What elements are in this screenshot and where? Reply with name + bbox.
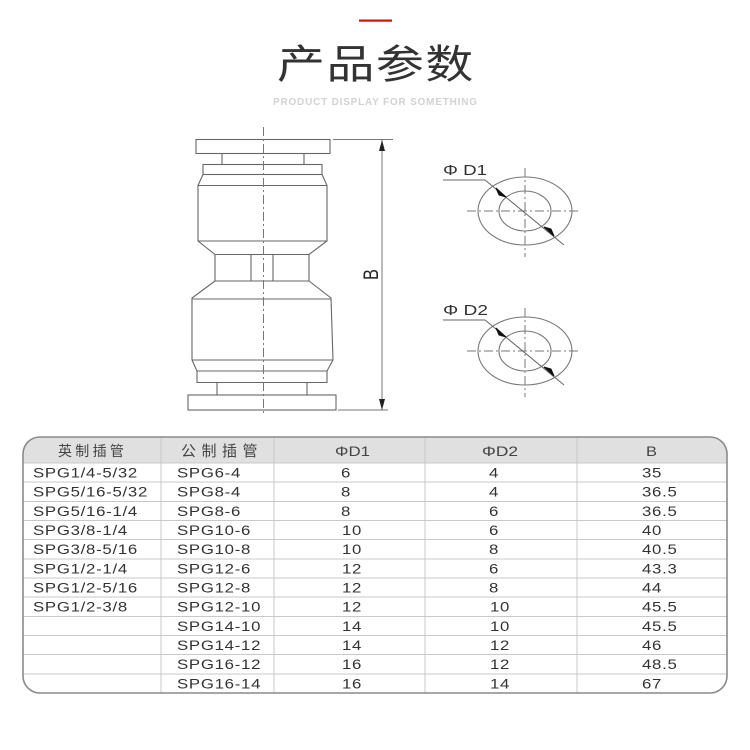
header row: ΦD2 [482,443,518,459]
row 9: 45.5 [642,619,678,634]
row 3: 36.5 [642,504,678,519]
row 5: SPG3/8-5/16 [33,542,138,558]
outer circle D2 [478,317,572,385]
top cap [196,140,330,154]
inner circle D1 [499,191,551,231]
row 7: SPG1/2-5/16 [33,581,138,596]
row 3: 8 [341,504,351,519]
row 9 [177,619,678,634]
row 2: SPG8-4 [177,485,241,500]
row 8: 12 [342,600,362,615]
bottom collar [197,371,327,382]
crosshair D1 [467,168,580,257]
row 10 [177,638,662,654]
header row: 公制插管 [181,443,263,460]
row 5: 10 [342,542,362,558]
row 12 [177,677,662,692]
subtitle: PRODUCT DISPLAY FOR SOMETHING [273,97,477,108]
upper body [198,174,327,254]
row 5: 8 [489,542,499,558]
row 11: 16 [342,657,362,673]
bottom neck [217,382,307,395]
grid lines [23,437,727,693]
row 11: SPG16-12 [177,657,261,673]
row 2: 8 [341,485,351,500]
row 9: 10 [490,619,510,634]
diagram: circle D2 [443,302,580,397]
row 8: SPG12-10 [177,600,261,615]
outer circle D1 [478,177,572,245]
leader D1 [443,180,564,245]
row 12: 16 [342,677,362,692]
row 5: SPG10-8 [177,542,251,558]
row 4: SPG10-6 [177,523,251,539]
row 2: 36.5 [642,485,678,500]
row 7: 44 [642,581,662,596]
arrows D2 [496,328,554,376]
row 8: 10 [490,600,510,615]
row 12: 67 [642,677,662,692]
title: 产品参数 [277,43,475,87]
header row [58,443,657,460]
label D1: Φ D1 [443,162,487,179]
row 4: 6 [489,523,499,539]
row 5: 40.5 [642,542,678,558]
arrows D1 [496,188,554,236]
bottom cap [188,395,336,410]
table border [23,437,727,693]
header row: ΦD1 [335,443,370,459]
row 2: SPG5/16-5/32 [33,485,148,500]
row 1: SPG6-4 [177,466,241,481]
row 4 [33,523,662,539]
table header background [23,437,727,463]
crosshair D2 [467,308,580,397]
row 3: 6 [489,504,499,519]
row 6: 43.3 [642,562,678,577]
row 9: 14 [342,619,362,634]
row 4: SPG3/8-1/4 [33,523,128,539]
row 3: SPG5/16-1/4 [33,504,138,519]
row 12: 14 [490,677,510,692]
row 6: 6 [489,562,499,577]
row 1: 35 [642,466,662,481]
lower body [192,281,333,371]
row 1 [33,466,662,481]
row 8: 45.5 [642,600,678,615]
top neck [222,154,304,164]
row 3 [33,504,678,519]
diagram: circle D1 [443,162,580,257]
row 11: 12 [490,657,510,673]
top collar [203,164,322,174]
row 7: 8 [489,581,499,596]
row 12: SPG16-14 [177,677,261,692]
row 2: 4 [489,485,499,500]
dimension B [333,140,393,410]
row 1: 6 [341,466,351,481]
row 4: 10 [342,523,362,539]
row 7: SPG12-8 [177,581,251,596]
row 9: SPG14-10 [177,619,261,634]
accent bar [359,20,392,22]
row 10: 46 [642,638,662,654]
row 10: 12 [490,638,510,654]
row 3: SPG8-6 [177,504,241,519]
leader D2 [443,320,564,385]
inner circle D2 [499,331,551,371]
label D2: Φ D2 [443,302,488,319]
row 6 [33,562,678,577]
specification table [23,437,727,693]
row 4: 40 [642,523,662,539]
row 6: 12 [342,562,362,577]
row 10: SPG14-12 [177,638,261,654]
header row: 英制插管 [58,443,127,459]
row 5 [33,542,678,558]
row 8: SPG1/2-3/8 [33,600,128,615]
waist [215,254,309,281]
row 1: SPG1/4-5/32 [33,466,138,481]
row 8 [33,600,678,615]
row 11 [177,657,678,673]
row 6: SPG1/2-1/4 [33,562,128,577]
row 11: 48.5 [642,657,678,673]
row 1: 4 [489,466,499,481]
row 2 [33,485,678,500]
diagram: connector side view [188,127,336,414]
dimension label B: B [359,269,382,280]
header row: B [646,443,657,459]
row 7 [33,581,662,596]
row 7: 12 [342,581,362,596]
row 6: SPG12-6 [177,562,251,577]
center line [262,127,264,414]
row 10: 14 [342,638,362,654]
arrow heads [379,140,385,410]
